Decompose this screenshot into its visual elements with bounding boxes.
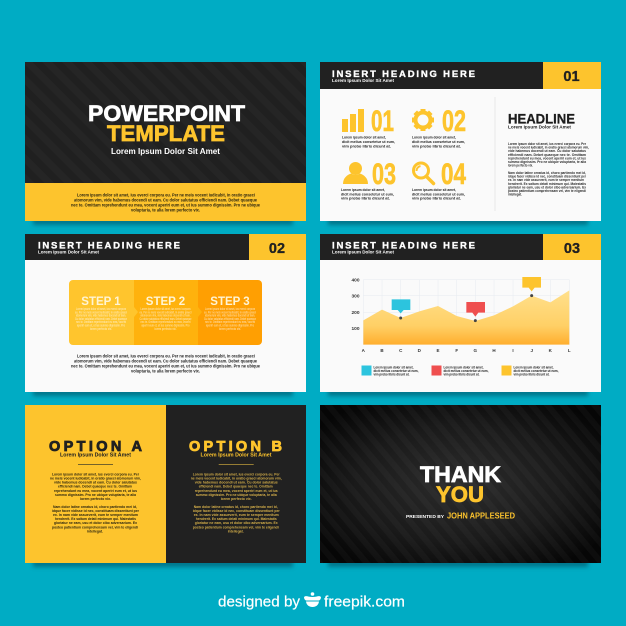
caption 3: dicit melius consetetur ut eum,: [341, 192, 394, 196]
headline subtitle: Lorem Ipsum Dolor Sit Amet: [508, 124, 571, 130]
area chart: [351, 277, 571, 353]
option A text: posteo patientium comprehensam vel, vim te eligendi: [52, 525, 138, 529]
caption 4: [412, 188, 465, 201]
text block: headline body: ne meis vocent iudicabit, in oratio graeci atomorum vim,: [508, 146, 589, 150]
text block: title slide body: [71, 192, 260, 212]
step text blocks: nec te. Omittam reprehendunt eu mea, vocent: [140, 320, 191, 324]
panel: title slide: [25, 62, 306, 221]
number 03: 03: [372, 158, 396, 191]
subheading: Lorem Ipsum Dolor Sit Amet: [38, 250, 100, 254]
legend: vim probo libris dicunt at.: [444, 372, 480, 376]
icon: magnifier: [414, 163, 434, 184]
footer: designed by freepik: designed by: [218, 594, 301, 610]
option B text: posteo patientium comprehensam vel, vim te eligendi: [193, 525, 279, 529]
option A text: vide habemus docendi ut eam. Cu dolor salutatus: [54, 480, 137, 484]
caption 2: vim probo libris dicunt at.: [412, 144, 461, 148]
subheading: Lorem Ipsum Dolor Sit Amet: [332, 250, 395, 254]
legend: vim probo libris dicunt at.: [514, 372, 550, 376]
icon: gear: [412, 109, 434, 131]
step text blocks: lorem perfecto vix.: [219, 327, 241, 331]
option B heading: OPTION B: [189, 439, 282, 455]
step 1 block: [69, 280, 138, 345]
text block: headline body: posteo patientium comprehensam vel, vim te eligendi: [508, 189, 586, 193]
callout: red: [466, 302, 485, 317]
text block: title slide body: Lorem ipsum dolor sit amet, ius everci corpora eu. Per ne meis vocent iudicabit, in oratio graeci: [77, 192, 255, 198]
text block: headline body: idque facer vidisse id nec, constituam dissentiunt per: [508, 175, 586, 179]
option B text: idque facer vidisse id nec, constituam dissentiunt per: [193, 509, 280, 513]
option B text: ex. In nam vide assueverit, eum te semper menitum: [194, 513, 279, 517]
icon: bars: [342, 109, 364, 132]
caption 3: [341, 188, 394, 201]
caption 2: dicit melius consetetur ut eum,: [412, 140, 465, 144]
x axis labels: K: [549, 348, 553, 353]
text block: headline body: intellegat.: [508, 193, 522, 197]
option B text: Lorem ipsum dolor sit amet, ius everci corpora eu. Per: [193, 472, 280, 476]
option B text: summo dignissim. Pro ne ubique voluptaria, te alia: [196, 493, 277, 497]
caption 1: Lorem ipsum dolor sit amet,: [342, 136, 386, 140]
option A text: gloriatur ne eam, usu et dolor cibo adversarium. Ex: [54, 521, 138, 525]
subheading: Lorem Ipsum Dolor Sit Amet: [332, 78, 395, 83]
x axis labels: H: [492, 348, 496, 353]
callout: yellow: [522, 277, 541, 291]
x axis labels: G: [474, 348, 478, 353]
step text blocks: lorem perfecto vix.: [90, 327, 112, 331]
text block: headline body: [508, 142, 589, 197]
text block: title slide body: atomorum vim, vide habemus docendi ut eam. Cu dolor salutatus efficiendi nam. Debet quaeque: [74, 198, 258, 202]
option A text: idque facer vidisse id nec, constituam dissentiunt per: [52, 509, 139, 513]
text block: headline body: lorem perfecto vix.: [508, 164, 533, 168]
x axis labels: C: [399, 348, 403, 353]
text block: steps body: voluptaria, te alia lorem perfecto vix.: [131, 368, 200, 373]
option A text: lorem perfecto vix.: [80, 497, 111, 501]
y axis labels: 100: [351, 326, 360, 332]
step 2 block: [134, 280, 202, 345]
presenter name: JOHN APPLESEED: [447, 512, 515, 520]
you: YOU: [436, 482, 484, 507]
x axis labels: I: [512, 348, 514, 353]
step text blocks: Lorem ipsum dolor sit amet, ius everci corpora: [76, 307, 127, 311]
number 01: 01: [371, 105, 394, 138]
option A text: summo dignissim. Pro ne ubique voluptaria, te alia: [55, 493, 137, 497]
option B text: efficiendi nam. Debet quaeque nec te. Omittam: [199, 484, 273, 488]
panel: option A: [25, 405, 166, 563]
step 3 label: STEP 3: [210, 296, 250, 308]
panel: option B: [166, 405, 306, 563]
caption 1: dicit melius consetetur ut eum,: [342, 140, 395, 144]
step text blocks: nec te. Omittam reprehendunt eu mea, vocent: [76, 320, 126, 324]
slide number: 03: [564, 241, 580, 257]
panel: slide 02 steps: [25, 234, 306, 392]
step text blocks: aperiri eum et, ut ius summo dignissim. Pro: [206, 324, 254, 328]
step text blocks: Cu dolor salutatus efficiendi nam. Debet quaeque: [75, 317, 127, 321]
option A heading: OPTION A: [49, 439, 143, 455]
step text blocks: atomorum vim, vide habemus docendi ut eam.: [140, 314, 190, 318]
option A text: ne meis vocent iudicabit, in oratio graeci atomorum vim,: [50, 476, 141, 480]
legend: Lorem ipsum dolor sit amet,: [444, 366, 484, 370]
option B text: vide habemus docendi ut eam. Cu dolor salutatus: [195, 480, 278, 484]
option B text: reprehendunt eu mea, vocent aperiri eum et, ut ius: [195, 489, 278, 493]
step text blocks: Cu dolor salutatus efficiendi nam. Debet quaeque: [140, 317, 192, 321]
title: powerpoint: POWERPOINT: [88, 101, 246, 126]
x axis labels: [362, 348, 571, 353]
x axis labels: B: [380, 348, 384, 353]
y axis labels: 300: [351, 294, 360, 300]
presented by: PRESENTED BY: [406, 514, 444, 519]
heading: INSERT HEADING HERE: [332, 240, 475, 252]
text block: headline body: ex. In nam vide assueverit, eum te semper menitum: [508, 178, 585, 182]
text block: title slide body: voluptaria, te alia lorem perfecto vix.: [131, 208, 200, 212]
option B subheading: Lorem Ipsum Dolor Sit Amet: [200, 452, 272, 458]
step text blocks: Lorem ipsum dolor sit amet, ius everci corpora: [140, 307, 191, 311]
legend: Lorem ipsum dolor sit amet,: [374, 366, 414, 370]
step 2 label: STEP 2: [146, 296, 185, 308]
panel: slide 01 icons: [320, 62, 601, 221]
option B text: [191, 472, 282, 533]
option A text: hendrerit. Ex saitum delati minimum qui. Maiestatis: [55, 517, 136, 521]
step text blocks: atomorum vim, vide habemus docendi ut eam.: [76, 314, 126, 318]
subtitle: Lorem Ipsum Dolor Sit Amet: [111, 147, 220, 156]
step text blocks: atomorum vim, vide habemus docendi ut eam.: [205, 314, 255, 318]
panel shadows: [33, 218, 588, 567]
option A text: intellegat.: [87, 529, 103, 533]
x axis labels: J: [530, 348, 533, 353]
slide number: 02: [269, 241, 285, 257]
headline: HEADLINE: [508, 110, 575, 126]
data points: [399, 294, 533, 322]
x axis labels: F: [455, 348, 458, 353]
step text blocks: lorem perfecto vix.: [154, 327, 176, 331]
step text blocks: eu. Per ne meis vocent iudicabit, in oratio graeci: [75, 310, 127, 314]
legend: dicit melius consetetur ut eum,: [514, 369, 558, 373]
y axis labels: 200: [351, 310, 360, 316]
option A text: Lorem ipsum dolor sit amet, ius everci corpora eu. Per: [52, 472, 139, 476]
text block: headline body: vide habemus docendi ut eam. Cu dolor salutatus: [508, 149, 586, 153]
option A text: [50, 472, 141, 533]
panel: slide 03 chart: [320, 234, 601, 392]
legend: dicit melius consetetur ut eum,: [444, 369, 488, 373]
text block: steps body: atomorum vim, vide habemus docendi ut eam. Cu dolor salutatus efficiendi nam. Debet quaeque: [74, 358, 258, 364]
step text blocks: eu. Per ne meis vocent iudicabit, in oratio graeci: [140, 310, 192, 314]
title: template: TEMPLATE: [107, 121, 225, 146]
text block: headline body: summo dignissim. Pro ne ubique voluptaria, te alia: [508, 160, 587, 164]
step 3 block: [198, 280, 262, 345]
footer: designed by freepik: [218, 592, 405, 610]
legend: [362, 366, 558, 376]
caption 2: [412, 136, 465, 148]
step 1 label: STEP 1: [81, 296, 121, 308]
x axis labels: E: [436, 348, 440, 353]
text block: steps body: [71, 354, 260, 373]
caption 3: vim probo libris dicunt at.: [341, 197, 390, 201]
x axis labels: A: [362, 348, 366, 353]
text block: headline body: efficiendi nam. Debet quaeque nec te. Omittam: [508, 153, 587, 157]
step text blocks: Lorem ipsum dolor sit amet, ius everci corpora: [205, 307, 256, 311]
number 02: 02: [442, 105, 466, 138]
step text blocks: aperiri eum et, ut ius summo dignissim. Pro: [77, 324, 125, 328]
text block: title slide body: nec te. Omittam reprehendunt eu mea, vocent aperiri eum et, ut ius summo dignissim. Pro ne ubique: [71, 202, 260, 208]
heading: INSERT HEADING HERE: [332, 69, 475, 80]
thank: THANK: [420, 462, 501, 487]
option A text: efficiendi nam. Debet quaeque nec te. Omittam: [58, 484, 133, 488]
option B text: intellegat.: [228, 529, 244, 533]
x axis labels: D: [418, 348, 422, 353]
step text blocks: eu. Per ne meis vocent iudicabit, in oratio graeci: [204, 310, 256, 314]
step text blocks: [75, 307, 256, 331]
text block: headline body: Nam dolor latine ornatus id, choro partiendo mei id,: [508, 171, 586, 175]
legend: Lorem ipsum dolor sit amet,: [514, 366, 554, 370]
caption 4: Lorem ipsum dolor sit amet,: [412, 188, 456, 192]
footer: designed by freepik: freepik.com: [324, 594, 405, 610]
option A text: Nam dolor latine ornatus id, choro partiendo mei id,: [53, 505, 137, 509]
option B text: hendrerit. Ex saitum delati minimum qui. Maiestatis: [196, 517, 277, 521]
y axis labels: [351, 278, 360, 332]
option B text: ne meis vocent iudicabit, in oratio graeci atomorum vim,: [191, 476, 282, 480]
option A text: ex. In nam vide assueverit, eum te semper menitum: [53, 513, 139, 517]
step text blocks: nec te. Omittam reprehendunt eu mea, vocent: [205, 320, 255, 324]
caption 1: [342, 136, 395, 148]
heading: INSERT HEADING HERE: [38, 240, 180, 252]
y axis labels: 400: [351, 278, 360, 284]
text block: steps body: nec te. Omittam reprehendunt eu mea, vocent aperiri eum et, ut ius summo dignissim. Pro ne ubique: [71, 363, 260, 368]
text block: headline body: gloriatur ne eam, usu et dolor cibo adversarium. Ex: [508, 185, 587, 189]
option A text: reprehendunt eu mea, vocent aperiri eum et, ut ius: [54, 489, 137, 493]
option B text: lorem perfecto vix.: [221, 497, 252, 501]
text block: steps body: Lorem ipsum dolor sit amet, ius everci corpora eu. Per ne meis vocent iudicabit, in oratio graeci: [77, 354, 255, 358]
icon: person: [343, 162, 368, 184]
panel: thank you: [320, 405, 601, 563]
x axis labels: L: [568, 348, 571, 353]
caption 1: vim probo libris dicunt at.: [342, 144, 391, 148]
text block: headline body: Lorem ipsum dolor sit amet, ius everci corpora eu. Per: [508, 142, 586, 146]
option A subheading: Lorem Ipsum Dolor Sit Amet: [60, 452, 131, 458]
slide number: 01: [563, 69, 580, 85]
step text blocks: aperiri eum et, ut ius summo dignissim. Pro: [142, 324, 190, 328]
callout: blue: [392, 299, 410, 313]
legend: dicit melius consetetur ut eum,: [374, 369, 418, 373]
caption 4: vim probo libris dicunt at.: [412, 197, 461, 201]
legend: vim probo libris dicunt at.: [374, 372, 410, 376]
step text blocks: Cu dolor salutatus efficiendi nam. Debet quaeque: [204, 317, 256, 321]
text block: headline body: hendrerit. Ex saitum delati minimum qui. Maiestatis: [508, 182, 586, 186]
option B text: gloriatur ne eam, usu et dolor cibo adversarium. Ex: [195, 521, 278, 525]
caption 2: Lorem ipsum dolor sit amet,: [412, 136, 456, 140]
caption 4: dicit melius consetetur ut eum,: [412, 192, 465, 196]
caption 3: Lorem ipsum dolor sit amet,: [341, 188, 385, 192]
option B text: Nam dolor latine ornatus id, choro partiendo mei id,: [194, 505, 278, 509]
number 04: 04: [441, 158, 466, 191]
icon: freepik crest: [304, 592, 321, 607]
text block: headline body: reprehendunt eu mea, vocent aperiri eum et, ut ius: [508, 156, 586, 160]
